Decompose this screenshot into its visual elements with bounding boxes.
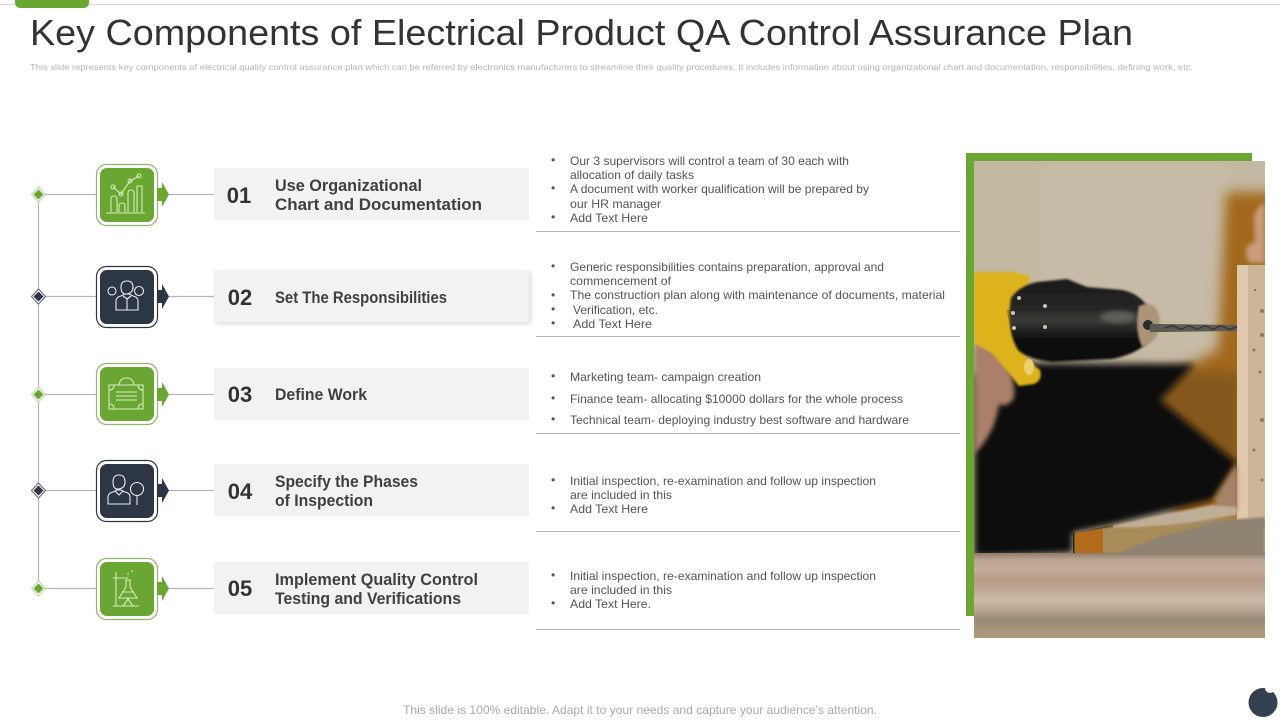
label 02 (214, 270, 529, 322)
text block 03: • (551, 412, 555, 426)
icon: business person (96, 266, 158, 328)
text block 02: • (551, 259, 555, 273)
text block 05: are included in this (570, 583, 672, 597)
label 03 (214, 368, 529, 420)
text block 05 (536, 568, 960, 630)
text block 01: our HR manager (570, 197, 661, 211)
green photo frame (966, 153, 1252, 616)
text block 02: • (551, 316, 555, 330)
text block 01: allocation of daily tasks (570, 168, 694, 182)
text block 01: Add Text Here (570, 211, 648, 225)
label 04: of Inspection (275, 491, 373, 510)
icon: growth chart (96, 164, 158, 226)
text block 01 (536, 153, 960, 232)
label 04: Specify the Phases (275, 472, 418, 491)
text block 02: commencement of (570, 274, 672, 288)
step 04 (32, 460, 529, 522)
marker diamond 03 (32, 387, 46, 402)
text block 04: • (551, 501, 555, 515)
label 05 (214, 562, 529, 614)
label 03: 03 (228, 382, 252, 407)
green top tab (15, 0, 89, 8)
text block 03: Technical team- deploying industry best software and hardware (570, 413, 909, 427)
text block 02 (536, 259, 960, 337)
text block 03: Finance team- allocating $10000 dollars for the whole process (570, 392, 903, 406)
text block 04: • (551, 473, 555, 487)
marker diamond 01 (32, 187, 46, 202)
icon: inspector (96, 460, 158, 522)
photo: power drill (974, 161, 1276, 638)
text block 05: Initial inspection, re-examination and follow up inspection (570, 569, 876, 583)
arrow 04 (157, 478, 169, 503)
timeline connector (38, 194, 214, 588)
text block 02: Generic responsibilities contains preparation, approval and (570, 260, 884, 274)
icon: briefcase (96, 364, 158, 424)
text block 01: Our 3 supervisors will control a team of 30 each with (570, 154, 849, 168)
label 02: Set The Responsibilities (275, 288, 447, 307)
text block 01: A document with worker qualification will be prepared by (570, 182, 869, 196)
label 04 (214, 464, 529, 516)
text block 05: • (551, 596, 555, 610)
text block 02: • (551, 302, 555, 316)
label 01: Chart and Documentation (275, 195, 482, 214)
text block 04: Add Text Here (570, 502, 648, 516)
text block 02: The construction plan along with maintenance of documents, material (570, 288, 945, 302)
label 05: 05 (228, 576, 252, 601)
label 01: Use Organizational (275, 176, 422, 195)
text block 05: • (551, 568, 555, 582)
footer note: This slide is 100% editable. Adapt it to your needs and capture your audience's attention. (403, 703, 877, 717)
marker diamond 05 (32, 581, 46, 596)
label 03: Define Work (275, 385, 368, 404)
text block 02: Verification, etc. (573, 303, 658, 317)
marker diamond 02 (32, 289, 46, 304)
text block 03: Marketing team- campaign creation (570, 370, 761, 384)
text block 01: • (551, 210, 555, 224)
label 02: 02 (228, 285, 252, 310)
marker diamond 04 (32, 483, 46, 498)
step 05 (32, 558, 529, 620)
step 03 (32, 364, 529, 424)
top rule (0, 4, 1280, 5)
icon: lab flask (96, 558, 158, 620)
arrow 01 (157, 182, 169, 207)
text block 04: are included in this (570, 488, 672, 502)
label 04: 04 (228, 479, 253, 504)
text block 03 (536, 369, 960, 434)
label 01: 01 (227, 183, 251, 208)
text block 04 (536, 473, 960, 532)
corner badge (1248, 683, 1278, 717)
step 02 (32, 266, 529, 328)
text block 02: Add Text Here (573, 317, 652, 331)
text block 01: • (551, 181, 555, 195)
text block 04: Initial inspection, re-examination and follow up inspection (570, 474, 876, 488)
arrow 02 (157, 284, 169, 309)
text block 03: • (551, 391, 555, 405)
step 01 (32, 164, 529, 226)
arrow 03 (157, 382, 169, 407)
text block 02: • (551, 288, 555, 302)
label 05: Implement Quality Control (275, 570, 478, 589)
subtitle: This slide represents key components of electrical quality control assurance plan which can be referred by electronics manufacturers to streamline their quality procedures. It includes information about using organizational chart and documentation, responsibilities, defining work, etc. (30, 62, 1193, 72)
text block 01: • (551, 153, 555, 167)
label 01 (214, 168, 529, 220)
label 05: Testing and Verifications (275, 589, 461, 608)
text block 05: Add Text Here. (570, 597, 651, 611)
text block 03: • (551, 369, 555, 383)
title: Key Components of Electrical Product QA Control Assurance Plan (30, 12, 1133, 53)
arrow 05 (157, 576, 169, 601)
